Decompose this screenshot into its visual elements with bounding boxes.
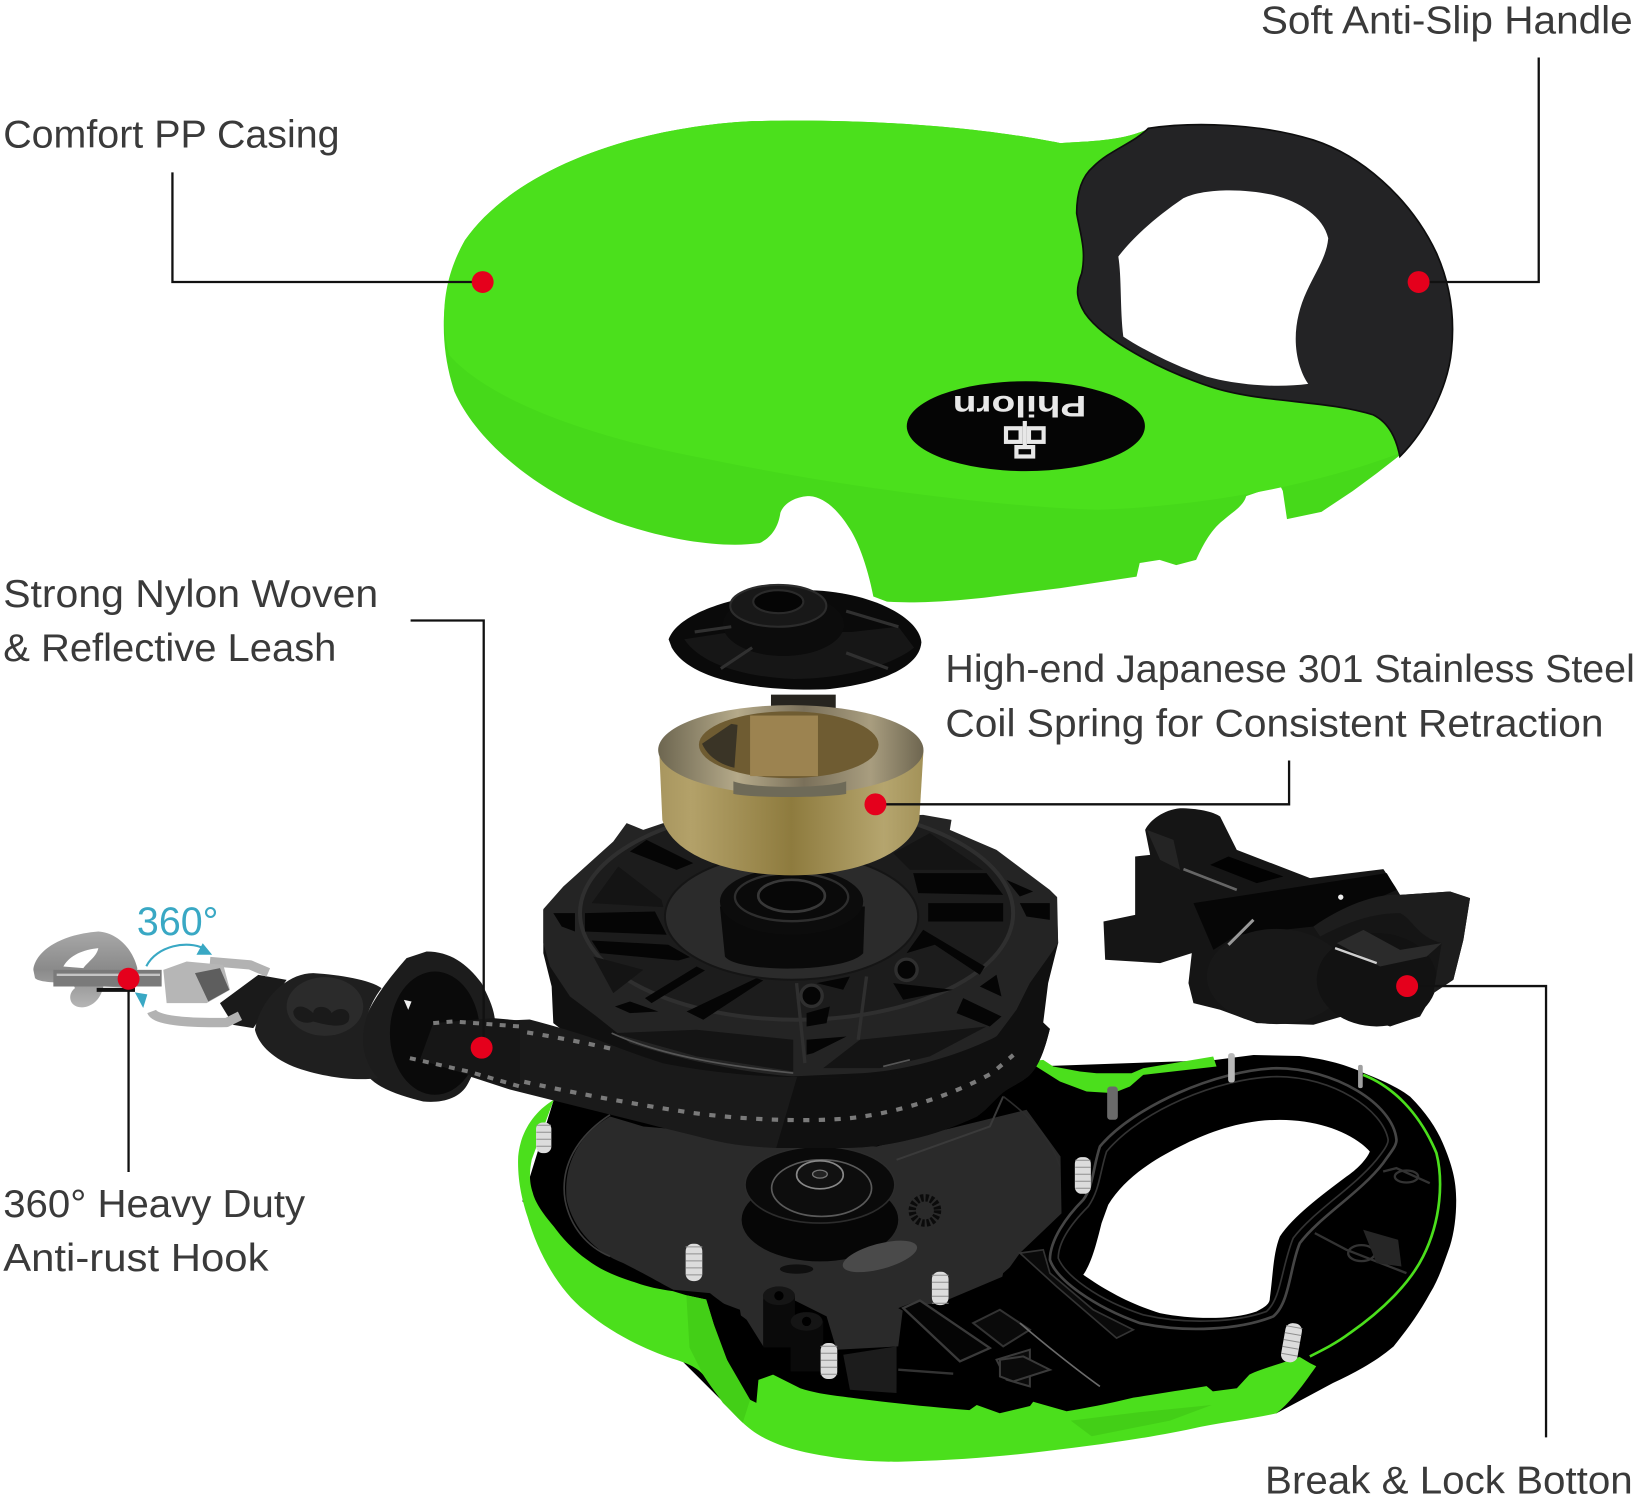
thin green edge <box>1310 1075 1440 1356</box>
leash strap <box>418 1010 1050 1148</box>
bottom housing <box>518 1053 1456 1462</box>
callout: comfort casing: Comfort PP Casing <box>3 113 340 156</box>
callout: leash: & Reflective Leash <box>3 627 336 670</box>
callout: handle: Soft Anti-Slip Handle <box>1261 0 1633 42</box>
lower slot <box>1020 1250 1133 1338</box>
callout: brake <box>1265 975 1633 1500</box>
rear interior arc <box>897 1096 1003 1160</box>
reel edge highlights <box>612 1033 910 1073</box>
housing green wall <box>518 1100 1316 1462</box>
callout: coil spring: High-end Japanese 301 Stainless Steel <box>945 648 1635 691</box>
handle section of housing <box>1000 1057 1440 1386</box>
logo badge: Philorn <box>953 389 1086 421</box>
upper spool cap <box>669 585 921 690</box>
coil top rim <box>658 705 923 795</box>
screw threads <box>544 1125 1294 1378</box>
leash stopper <box>362 952 520 1102</box>
black block details <box>713 1250 1030 1410</box>
callout: leash: Strong Nylon Woven <box>3 573 378 616</box>
callout: coil spring <box>864 648 1635 815</box>
gasket outer line <box>1050 1068 1396 1329</box>
soft grip handle <box>1077 125 1453 457</box>
coil spring <box>658 695 923 875</box>
casing side wall <box>444 121 1405 602</box>
floor lower panel <box>843 1346 897 1393</box>
reel inner ring <box>665 853 918 980</box>
rotation indicator: 360° <box>137 900 218 944</box>
green lip <box>1028 1057 1217 1093</box>
swivel body <box>163 962 230 1003</box>
button left block <box>1147 830 1180 870</box>
hook pin <box>53 970 162 987</box>
rotation indicator <box>135 900 218 1008</box>
coil outer wall <box>659 750 923 875</box>
callout: comfort casing <box>3 113 494 293</box>
housing black shell <box>522 1055 1456 1452</box>
swivel snap hook <box>33 932 268 1023</box>
callout: hook: Anti-rust Hook <box>3 1237 269 1280</box>
handle opening <box>1118 190 1328 386</box>
top casing <box>444 121 1453 602</box>
gear mark <box>912 1198 938 1223</box>
callout: hook <box>3 968 306 1280</box>
housing screws <box>536 1053 1363 1379</box>
reel outer rib circle <box>580 807 1013 1020</box>
button thumb tab <box>1337 930 1442 966</box>
mounting posts <box>763 1286 823 1371</box>
logo badge <box>907 381 1145 471</box>
casing top face <box>444 121 1405 510</box>
reel top face <box>543 815 1058 1076</box>
reel recessed panels <box>592 833 986 1071</box>
reel hub <box>720 868 865 969</box>
floor light smudge <box>840 1234 920 1279</box>
large reel <box>543 807 1058 1103</box>
callout: leash <box>3 573 493 1059</box>
button top slot <box>1210 857 1283 883</box>
coil inner opening <box>699 711 879 778</box>
paw mark <box>293 1007 349 1026</box>
swivel ring <box>152 962 268 1023</box>
gasket inner line <box>1058 1077 1388 1321</box>
logo mark <box>1006 421 1044 456</box>
side boss details <box>1315 1168 1430 1273</box>
rear pocket <box>1363 1230 1401 1266</box>
button lever plate <box>1193 873 1397 950</box>
hook body <box>33 932 137 1007</box>
reel boss holes <box>797 959 917 1063</box>
central axle <box>742 1146 898 1261</box>
leash tag with paw <box>220 973 382 1079</box>
reel drum <box>543 896 1058 1103</box>
brake and lock button <box>1103 808 1470 1026</box>
strap darker wrap <box>776 1010 1050 1148</box>
green band highlight <box>1071 1405 1212 1436</box>
button lower lobes <box>1207 929 1347 1024</box>
coil tab <box>771 695 836 713</box>
callout: coil spring: Coil Spring for Consistent Retraction <box>945 702 1603 745</box>
callout: hook: 360° Heavy Duty <box>3 1183 306 1226</box>
callout: handle <box>1261 0 1633 293</box>
housing floor <box>564 1096 1062 1410</box>
coil front rim highlight <box>733 781 846 797</box>
floor rim line <box>564 1115 610 1256</box>
rotation arrow <box>146 945 204 966</box>
handle opening <box>1083 1120 1370 1318</box>
green wall corner shading <box>686 1295 750 1423</box>
strap stitching <box>418 1025 1013 1120</box>
reel rib pockets <box>553 840 1050 1055</box>
